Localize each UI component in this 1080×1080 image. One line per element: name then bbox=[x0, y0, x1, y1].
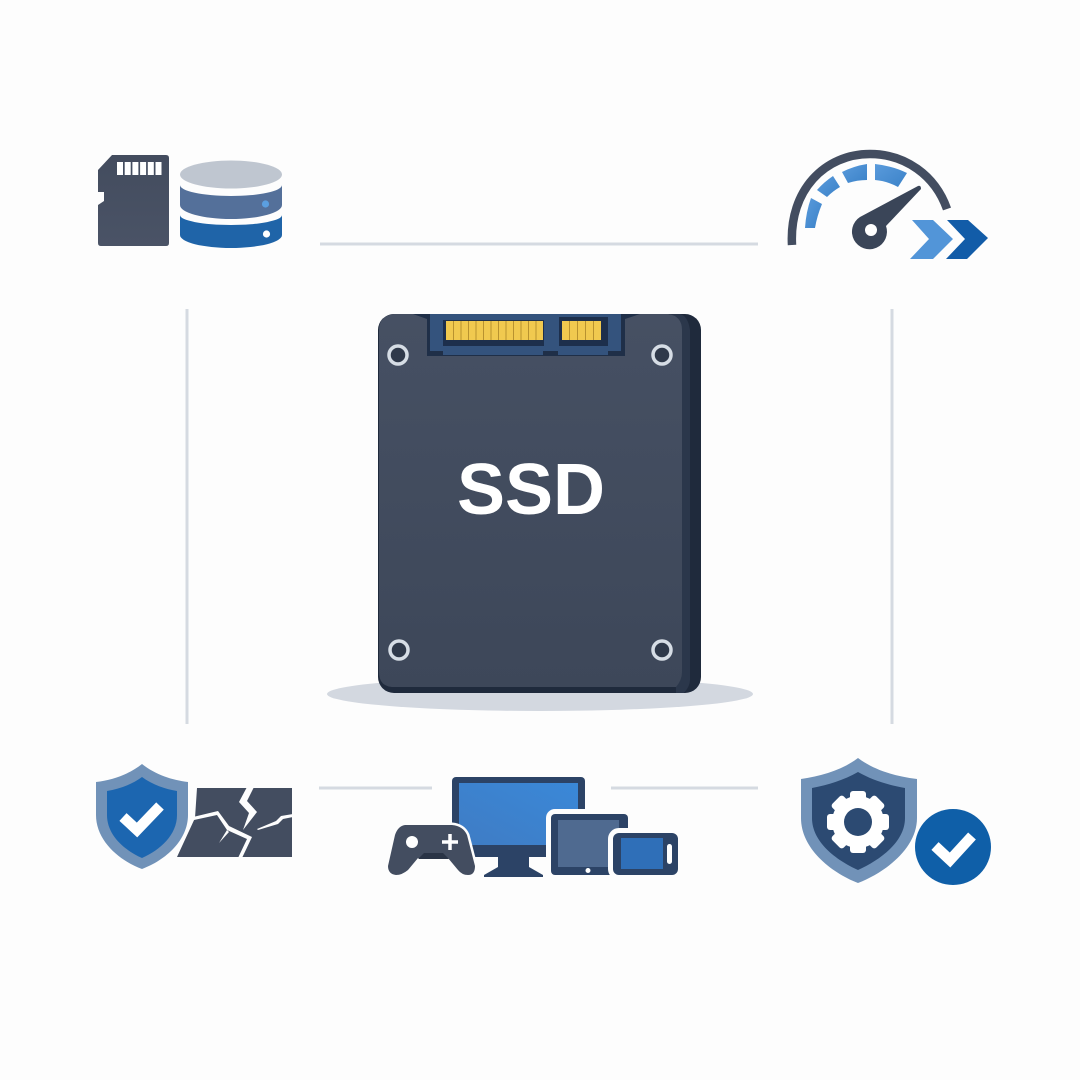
icon: check badge bbox=[915, 809, 991, 885]
icon: gear shield bbox=[801, 758, 917, 883]
drive shadow bbox=[327, 677, 753, 711]
SATA connector bbox=[413, 314, 640, 356]
icon: gear shield with check badge bbox=[801, 758, 991, 885]
icon: monitor bbox=[452, 777, 585, 877]
icon: check shield bbox=[96, 764, 188, 869]
icon: memory card and database bbox=[98, 155, 282, 248]
mounting screws bbox=[389, 346, 671, 659]
gauge blue segments bbox=[805, 164, 907, 228]
icon: shield with cracked surface bbox=[96, 764, 293, 869]
icon: SD card bbox=[98, 155, 169, 246]
icon: phone bbox=[613, 833, 678, 875]
icon: cracked slab bbox=[177, 787, 293, 858]
gauge needle bbox=[852, 186, 921, 249]
icon: speedometer with chevrons bbox=[792, 154, 988, 259]
gauge outer arc bbox=[792, 154, 947, 245]
drive body bbox=[378, 314, 701, 693]
SSD drive bbox=[327, 314, 753, 711]
icon: game controller bbox=[388, 825, 475, 875]
icon: tablet bbox=[551, 814, 628, 875]
speed chevrons bbox=[910, 220, 988, 259]
SSD label: SSD bbox=[457, 450, 605, 530]
icon: database stack bbox=[180, 160, 282, 248]
icon: gaming and display devices bbox=[388, 777, 678, 877]
gear bbox=[827, 791, 889, 853]
